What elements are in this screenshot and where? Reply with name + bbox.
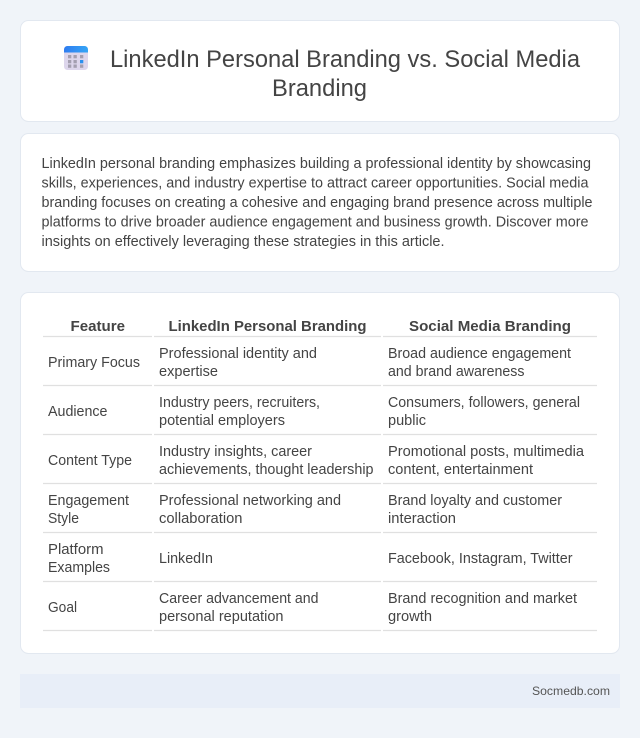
- text block: introduction: LinkedIn personal branding emphasizes building a professional identity by showcasing: [42, 156, 591, 172]
- row: audience: potential employers: [159, 413, 285, 429]
- row: engagement style: Style: [48, 511, 79, 527]
- row: audience: Consumers, followers, general: [388, 395, 580, 411]
- row: primary focus: Primary Focus: [48, 355, 140, 371]
- text block: introduction: [42, 156, 592, 250]
- row: goal: [48, 591, 577, 625]
- row: content type: achievements, thought leadership: [159, 462, 374, 478]
- row: goal: growth: [388, 609, 432, 625]
- row: platform examples: LinkedIn: [159, 551, 213, 567]
- row: engagement style: interaction: [388, 511, 456, 527]
- row: goal: Goal: [48, 600, 77, 616]
- row: content type: content, entertainment: [388, 462, 533, 478]
- row: audience: public: [388, 413, 426, 429]
- row: audience: [48, 395, 580, 429]
- row: content type: Industry insights, career: [159, 444, 312, 460]
- table header: Social Media Branding: [409, 318, 571, 335]
- footer: [20, 674, 620, 708]
- row: platform examples: Platform: [48, 542, 104, 558]
- row: platform examples: Examples: [48, 560, 110, 576]
- icon: calendar: [64, 46, 88, 70]
- footer: Socmedb.com: [532, 684, 610, 698]
- row: engagement style: Professional networking and: [159, 493, 341, 509]
- row: audience: Audience: [48, 404, 108, 420]
- row: engagement style: collaboration: [159, 511, 242, 527]
- row: primary focus: Professional identity and: [159, 346, 317, 362]
- panel: title card: [20, 20, 620, 122]
- row: goal: Brand recognition and market: [388, 591, 577, 607]
- text block: introduction: insights on effectively leveraging these strategies in this article.: [42, 234, 444, 250]
- row: engagement style: Engagement: [48, 493, 129, 509]
- row: primary focus: and brand awareness: [388, 364, 524, 380]
- row: platform examples: [48, 542, 573, 576]
- row: engagement style: Brand loyalty and customer: [388, 493, 562, 509]
- title: [110, 46, 580, 102]
- row: engagement style: [48, 493, 562, 527]
- text block: introduction: branding focuses on creating a cohesive and engaging brand presence across multiple: [42, 195, 592, 211]
- row: primary focus: Broad audience engagement: [388, 346, 571, 362]
- text block: introduction: platforms to drive broader audience engagement and business growth. Discover more: [42, 214, 588, 230]
- row: goal: personal reputation: [159, 609, 284, 625]
- row: content type: Content Type: [48, 453, 132, 469]
- title: LinkedIn Personal Branding vs. Social Media: [110, 46, 580, 73]
- row: content type: Promotional posts, multimedia: [388, 444, 585, 460]
- text block: introduction: skills, experiences, and industry expertise to attract career opportunities. Social media: [42, 176, 589, 192]
- row: goal: Career advancement and: [159, 591, 318, 607]
- panel: comparison table: [20, 292, 620, 654]
- title: Branding: [272, 75, 367, 102]
- table header: [70, 318, 571, 335]
- table header: LinkedIn Personal Branding: [168, 318, 366, 335]
- row: audience: Industry peers, recruiters,: [159, 395, 320, 411]
- panel: introduction: [20, 134, 620, 272]
- table header: Feature: [70, 318, 125, 335]
- row: platform examples: Facebook, Instagram, Twitter: [388, 551, 573, 567]
- row: content type: [48, 444, 585, 478]
- row: primary focus: expertise: [159, 364, 218, 380]
- row: primary focus: [48, 346, 571, 380]
